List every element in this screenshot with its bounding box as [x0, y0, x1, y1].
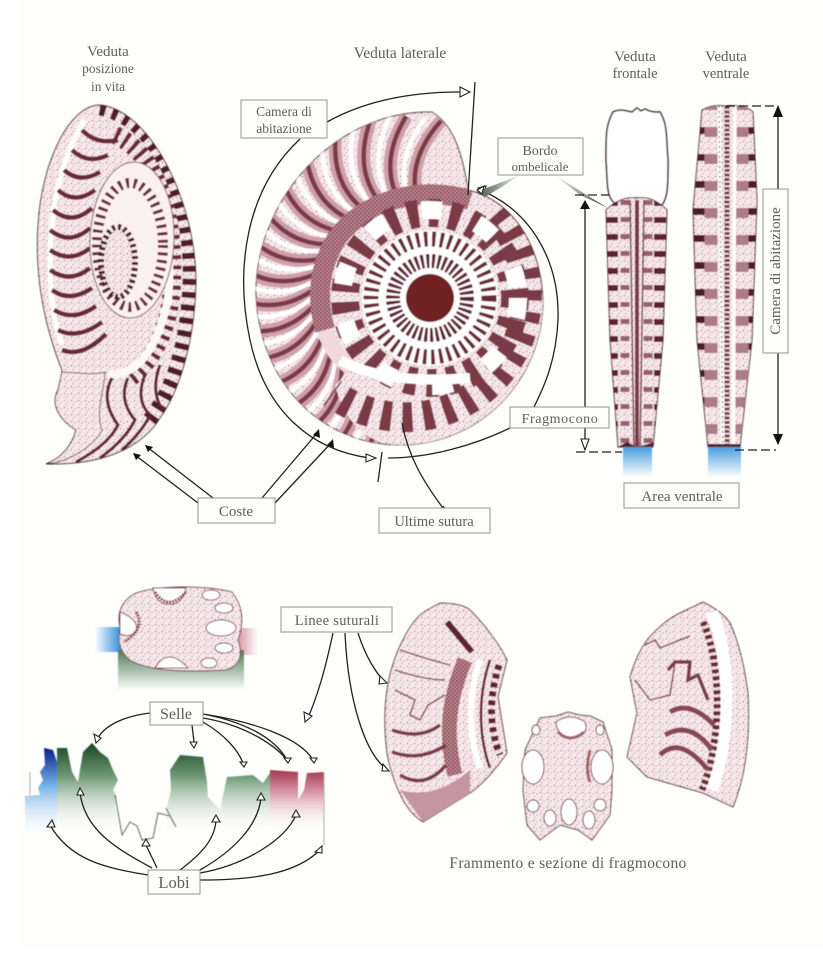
label: Linee suturali	[281, 607, 392, 632]
title: Veduta ventrale: Veduta	[705, 49, 747, 65]
section outline	[119, 587, 242, 671]
title: Veduta posizione in vita	[82, 44, 134, 94]
arrows: Coste	[133, 429, 334, 503]
label: Area ventrale: Area ventrale	[641, 489, 723, 505]
end tick	[30, 772, 324, 845]
label: Selle	[150, 702, 203, 725]
label: Ultime sutura	[379, 508, 490, 533]
fragment: right phragmocone piece	[627, 602, 749, 807]
title: Veduta posizione in vita: posizione	[82, 61, 134, 76]
title: Veduta ventrale	[703, 49, 749, 82]
lower shading	[400, 770, 470, 822]
inner whorls	[362, 230, 498, 366]
title: Veduta posizione in vita: in vita	[91, 79, 125, 94]
title: Veduta posizione in vita: Veduta	[87, 44, 129, 60]
middle suture ring	[345, 213, 515, 383]
ammonite: side view in life position	[37, 105, 196, 464]
title: Veduta frontale: Veduta	[614, 49, 656, 65]
inner whorl	[87, 161, 177, 319]
arrows: body chamber and phragmocone span	[244, 82, 558, 510]
white seam	[340, 360, 470, 380]
ventral colour patch	[708, 447, 741, 477]
white rib crests	[255, 116, 427, 440]
label: Camera di abitazione: abitazione	[256, 121, 312, 136]
colour patches	[95, 627, 121, 652]
fragment: central section	[522, 712, 613, 840]
label: Fragmocono	[510, 407, 609, 428]
umbilical dark band	[320, 194, 470, 330]
arrows: Selle	[94, 713, 317, 767]
label: Selle: Selle	[160, 706, 192, 723]
suture line diagram	[25, 743, 324, 845]
label: Lobi	[148, 870, 200, 894]
label: Area ventrale	[624, 483, 739, 508]
outer rib row	[100, 108, 190, 425]
middle rib row	[115, 135, 172, 378]
outer suture blotches	[332, 214, 527, 417]
shell base	[256, 112, 543, 445]
cross section with colour codes	[95, 587, 258, 690]
fragment: left phragmocone piece	[385, 603, 507, 822]
arrows: Linee suturali	[304, 633, 389, 771]
white left rim	[50, 120, 85, 345]
label: Camera di abitazione: Camera di	[256, 104, 312, 119]
arrows: Lobi	[47, 788, 322, 880]
ammonite: frontal view	[606, 108, 668, 477]
title: Veduta laterale: Veduta laterale	[354, 45, 446, 62]
label: Ultime sutura: Ultime sutura	[394, 514, 474, 530]
white lobe suture	[115, 795, 176, 840]
label: Coste: Coste	[219, 504, 253, 520]
label: Fragmocono: Fragmocono	[522, 412, 598, 427]
label: Bordo ombelicale	[498, 138, 583, 175]
dimension line: camera di abitazione	[726, 105, 783, 450]
label: Bordo ombelicale: ombelicale	[511, 159, 569, 174]
ammonite: lateral view	[254, 110, 544, 446]
rib body	[606, 198, 667, 447]
shell outline	[37, 105, 196, 464]
title: Veduta frontale	[612, 49, 658, 82]
ammonite: ventral view	[693, 100, 757, 477]
green saddle left	[57, 743, 120, 845]
label: Linee suturali: Linee suturali	[295, 613, 379, 629]
label: Camera di abitazione (vertical)	[763, 189, 788, 353]
leader wedges: Bordo ombelicale	[476, 176, 608, 208]
label: Camera di abitazione	[241, 100, 327, 138]
title: Veduta frontale: frontale	[612, 66, 658, 82]
ventral colour patch	[623, 447, 652, 477]
apertural edge ribs	[76, 365, 163, 462]
dark ribs and band	[447, 622, 472, 652]
shaded rib bands	[256, 114, 446, 444]
green saddle right	[166, 755, 270, 840]
aperture lappet	[46, 372, 105, 464]
white spiral band	[108, 162, 169, 374]
blue lobe	[25, 748, 57, 842]
aperture outline	[606, 108, 668, 207]
title: Veduta ventrale: ventrale	[703, 66, 749, 82]
label: Bordo ombelicale: Bordo	[522, 144, 558, 159]
dimension line: fragmocono	[575, 195, 637, 452]
caption: Frammento e sezione di fragmocono: Frammento e sezione di fragmocono	[449, 855, 687, 872]
label: Camera di abitazione (vertical): Camera di abitazione	[768, 207, 784, 335]
red saddle	[270, 770, 324, 832]
label: Lobi: Lobi	[158, 873, 190, 892]
label: Coste	[198, 498, 275, 523]
fragmocone outer whorl	[335, 201, 543, 445]
dark rib lines	[256, 114, 444, 443]
ribs on the flank	[50, 130, 118, 352]
saddles	[120, 588, 236, 668]
